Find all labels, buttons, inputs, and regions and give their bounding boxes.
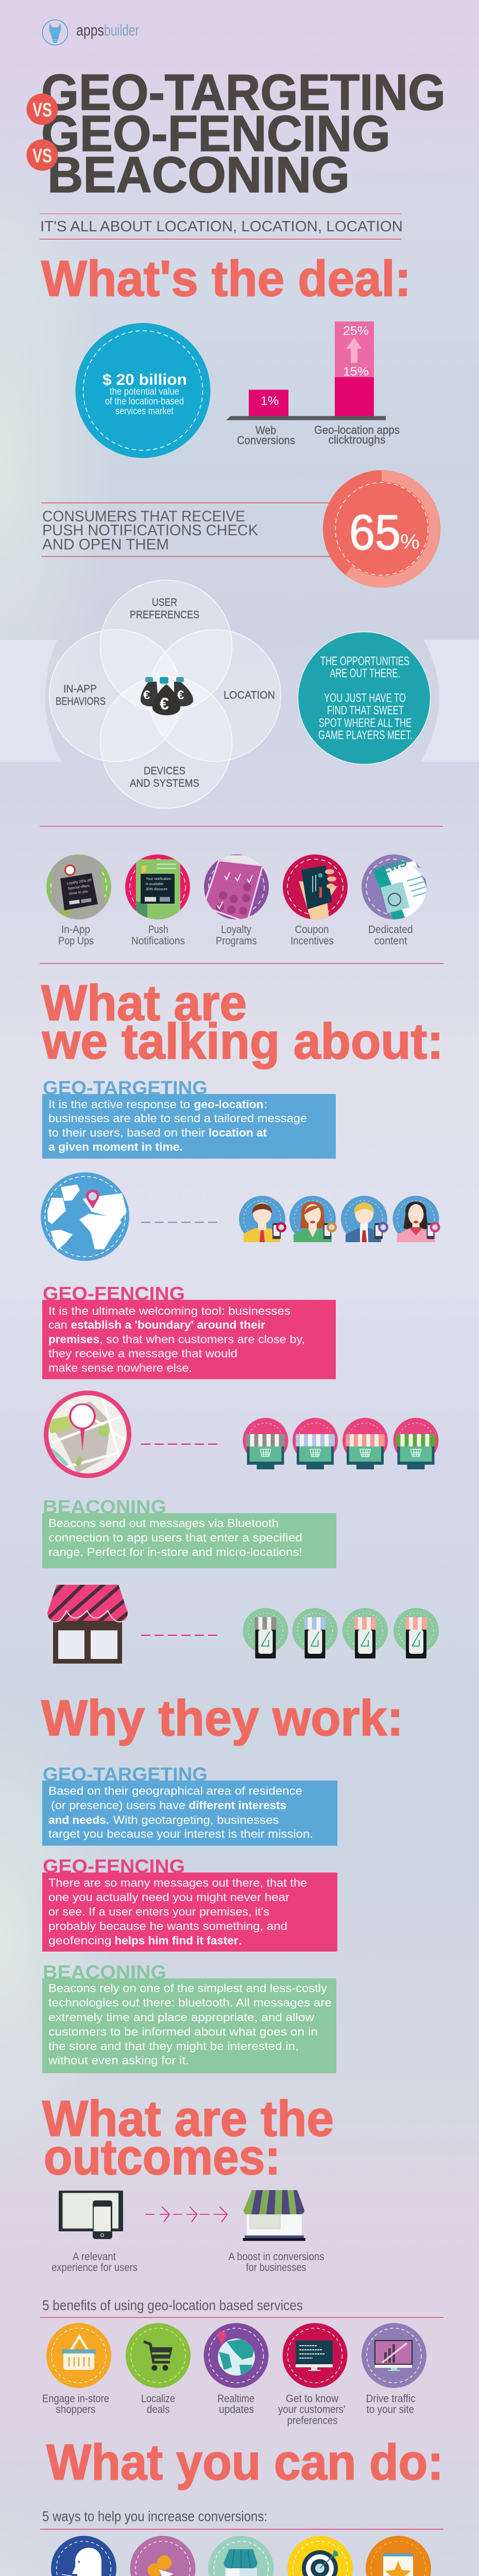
panel: why geo-fencing works: .. xyxy=(238,1934,242,1947)
stat circle: 20 billion: the potential value xyxy=(110,386,179,397)
dashed connector xyxy=(141,1635,219,1636)
donut: 65 percent xyxy=(323,470,440,587)
stat text: push notifications xyxy=(42,508,258,553)
stat circle: 20 billion: $ 20 billion xyxy=(102,370,187,388)
heading: what's the deal: What's the deal: xyxy=(41,250,411,307)
outcome labels: A boost in conversions xyxy=(229,2251,324,2263)
panel: why geo-fencing works: GEO-FENCING xyxy=(43,1856,185,1877)
icon: tablet and phone xyxy=(59,2191,123,2239)
venn diagram: DEVICES xyxy=(144,765,185,777)
logo: appsbuilder top: builder xyxy=(104,21,139,39)
icon: store green awning xyxy=(394,1418,439,1469)
icon: match currency xyxy=(130,2536,196,2576)
stat text: push notifications: PUSH NOTIFICATIONS CHECK xyxy=(42,522,258,539)
benefit labels: Engage in-store xyxy=(42,2393,109,2405)
icon: realtime updates globe xyxy=(204,2323,269,2388)
panel: geo-targeting definition: It is the active response to xyxy=(48,1098,190,1111)
panel: why beaconing works: technologies out there: bluetooth. All messages are xyxy=(48,1996,332,2009)
icon labels: five engagement types: Programs xyxy=(216,935,256,947)
icon: know customers monitor xyxy=(282,2323,347,2388)
panel: geo-fencing definition: they receive a message that would xyxy=(48,1347,237,1360)
icon labels: five engagement types: Pop Ups xyxy=(58,935,94,947)
vs badge 2 xyxy=(27,139,58,171)
icon labels: five engagement types: Incentives xyxy=(290,935,334,947)
icon: test visual elements star xyxy=(366,2536,431,2576)
icon: money bags xyxy=(141,677,193,715)
icon: beacon device salmon 2 xyxy=(394,1608,439,1658)
panel: geo-fencing definition: , so that when customers are close by, xyxy=(99,1333,305,1346)
panel: geo-fencing definition: establish a 'boundary' around their xyxy=(71,1318,265,1331)
donut: 65 percent: % xyxy=(400,531,420,553)
stat circle: 20 billion xyxy=(75,323,210,458)
panel: geo-targeting definition xyxy=(42,1077,336,1159)
icon: experiment with languages xyxy=(51,2536,116,2576)
icon: map with pin xyxy=(44,1391,134,1484)
dashed connector xyxy=(141,1444,219,1445)
icon: engage in-store basket xyxy=(46,2323,111,2388)
icon: globe with pin xyxy=(41,1173,129,1261)
subheading: 5 ways: 5 ways to help you increase conversions: xyxy=(42,2508,267,2524)
icon: in-app pop ups: Special offers xyxy=(67,884,90,891)
panel: beaconing definition xyxy=(42,1496,336,1568)
panel: why geo-targeting works: GEO-TARGETING xyxy=(43,1764,208,1785)
panel: geo-fencing definition: make sense nowhere else. xyxy=(48,1361,192,1375)
donut: 65 percent: 65 xyxy=(349,505,401,560)
stat circle: 20 billion: services market xyxy=(115,406,174,417)
dashed connector xyxy=(141,1222,220,1223)
outcome labels: experience for users xyxy=(52,2262,138,2274)
panel: geo-targeting definition: to their users, based on their xyxy=(48,1126,205,1139)
benefit labels: updates xyxy=(219,2404,254,2415)
panel: geo-targeting definition: a given moment in time. xyxy=(48,1141,183,1153)
panel: geo-targeting definition: geo-location xyxy=(194,1098,264,1111)
icon: push notifications: is available xyxy=(146,883,164,886)
callout: opportunities: ARE OUT THERE. xyxy=(330,667,400,680)
icon labels: five engagement types xyxy=(58,924,413,947)
panel: why geo-fencing works: probably because he wants something, and xyxy=(48,1920,287,1933)
bar chart: conversions: Conversions xyxy=(237,434,295,447)
heading: what are the outcomes: What are the xyxy=(42,2091,334,2146)
panel: why geo-targeting works: With geotargeting, businesses xyxy=(113,1814,279,1826)
icon labels: five engagement types: Dedicated xyxy=(368,924,413,936)
icon: money bags: € xyxy=(143,688,150,702)
callout: opportunities: SPOT WHERE ALL THE xyxy=(319,716,412,730)
benefit labels: Drive traffic xyxy=(366,2393,415,2405)
benefit labels: Localize xyxy=(141,2393,175,2405)
icon: beacon device blue xyxy=(293,1608,338,1658)
icon: woman green top with phone xyxy=(289,1196,337,1242)
venn diagram: LOCATION xyxy=(224,689,275,701)
icon: man yellow jacket with phone xyxy=(239,1196,286,1242)
subheading: 5 benefits: 5 benefits of using geo-location based services xyxy=(42,2297,303,2313)
title: GEO-TARGETING xyxy=(41,64,446,121)
panel: why geo-fencing works: one you actually need you might never hear xyxy=(48,1891,289,1904)
panel: geo-targeting definition: : xyxy=(264,1098,267,1111)
bar chart: conversions: 15% xyxy=(343,365,369,379)
icon labels: five engagement types: Coupon xyxy=(295,924,329,936)
callout: opportunities xyxy=(298,632,431,765)
venn diagram: PREFERENCES xyxy=(130,609,199,621)
vs badge 1 xyxy=(27,94,58,125)
icon labels: five engagement types: In-App xyxy=(61,924,90,936)
benefit labels: your customers' xyxy=(278,2404,345,2415)
panel: why beaconing works: extremely time and place appropriate, and allow xyxy=(48,2011,314,2024)
venn diagram: AND SYSTEMS xyxy=(130,777,199,789)
panel: why beaconing works: BEACONING xyxy=(43,1962,166,1982)
bar chart: conversions: clicktroughs xyxy=(329,433,385,446)
icon: match marketing target xyxy=(287,2536,353,2576)
vs badge 1: VS xyxy=(32,99,52,121)
heading: what are we talking about: we talking about: xyxy=(42,1013,443,1070)
icon labels: five engagement types: content xyxy=(374,935,407,947)
panel: beaconing definition: Beacons send out messages via Bluetooth xyxy=(48,1517,279,1530)
benefit labels: deals xyxy=(147,2404,170,2415)
benefit labels: Get to know xyxy=(286,2393,339,2405)
callout: opportunities: GAME PLAYERS MEET. xyxy=(318,728,413,742)
venn diagram: USER xyxy=(152,597,177,608)
heading: what are we talking about xyxy=(41,975,443,1070)
title: BEACONING xyxy=(47,146,350,203)
benefit labels xyxy=(42,2393,415,2427)
panel: why beaconing works: customers to be informed about what goes on in xyxy=(48,2025,318,2038)
panel: geo-targeting definition: businesses are able to send a tailored message xyxy=(48,1112,307,1125)
panel: why beaconing works xyxy=(42,1962,336,2073)
callout: opportunities: THE OPPORTUNITIES xyxy=(320,654,409,668)
icon: in-app pop ups xyxy=(46,854,111,920)
heading: what you can do: What you can do: xyxy=(46,2434,443,2490)
bar chart: conversions: 25% xyxy=(343,324,369,338)
panel: beaconing definition: BEACONING xyxy=(43,1496,166,1518)
benefit labels: to your site xyxy=(367,2404,414,2415)
panel: why beaconing works: Beacons rely on one of the simplest and less-costly xyxy=(48,1981,327,1995)
icon labels: five engagement types: Loyalty xyxy=(221,924,251,936)
panel: why geo-targeting works: and needs. xyxy=(48,1814,109,1826)
logo: appsbuilder top: apps xyxy=(76,21,104,39)
stat text: push notifications: AND OPEN THEM xyxy=(42,536,169,553)
title: GEO-FENCING xyxy=(41,105,390,162)
panel: beaconing definition: range. Perfect for in-store and micro-locations! xyxy=(48,1546,302,1558)
vs badge 2: VS xyxy=(32,145,52,167)
panel: geo-fencing definition: It is the ultimate welcoming tool: businesses xyxy=(48,1304,290,1317)
icon: loyalty programs xyxy=(203,854,269,922)
callout: opportunities: YOU JUST HAVE TO xyxy=(324,691,406,705)
stat text: push notifications: CONSUMERS THAT RECEIVE xyxy=(42,508,245,525)
heading: what are the outcomes xyxy=(42,2091,334,2185)
icon: money bags: € xyxy=(177,688,184,702)
outcome labels: for businesses xyxy=(246,2262,306,2274)
panel: geo-fencing definition: GEO-FENCING xyxy=(43,1283,185,1304)
panel: why geo-targeting works xyxy=(42,1764,337,1845)
icon: push notifications: 30% discount xyxy=(146,888,167,891)
panel: why geo-fencing works: helps him find it faster xyxy=(114,1934,238,1947)
icon: dedicated content xyxy=(362,854,426,919)
panel: geo-fencing definition xyxy=(42,1283,336,1379)
icon: money bags: € xyxy=(160,694,169,713)
title xyxy=(41,64,446,203)
icon: push notifications xyxy=(125,854,190,921)
icon: store grey awning xyxy=(243,1418,288,1469)
venn diagram xyxy=(49,580,281,808)
icon: localize deals cart xyxy=(126,2323,191,2388)
icon: store blue awning xyxy=(293,1418,338,1469)
panel: why geo-fencing works: There are so many messages out there, that the xyxy=(48,1876,307,1889)
icon: store salmon awning xyxy=(343,1418,388,1469)
panel: why beaconing works: the store and that they might be interested in, xyxy=(48,2040,299,2053)
icon: drive traffic monitor xyxy=(362,2323,426,2388)
icon: beacon device salmon xyxy=(343,1608,388,1658)
icon: storefront xyxy=(243,2190,305,2241)
bar chart: conversions: 1% xyxy=(261,394,279,408)
icon: in-app pop ups: close to you xyxy=(69,890,88,896)
outcome labels: A relevant xyxy=(73,2251,116,2263)
icon: beacon device grey xyxy=(243,1608,288,1658)
panel: why beaconing works: without even asking for it. xyxy=(48,2054,189,2067)
callout: opportunities: FIND THAT SWEET xyxy=(327,704,404,717)
panel: geo-fencing definition: premises xyxy=(48,1333,99,1346)
icon: man blue suit with phone xyxy=(341,1196,388,1242)
panel: geo-targeting definition: GEO-TARGETING xyxy=(43,1077,208,1098)
panel: why geo-targeting works: Based on their geographical area of residence xyxy=(48,1785,302,1797)
icon: dedicated content: NEWS xyxy=(372,856,408,879)
icon labels: five engagement types: Notifications xyxy=(131,935,185,947)
benefit labels: shoppers xyxy=(56,2404,96,2415)
panel: beaconing definition: connection to app users that enter a specified xyxy=(48,1531,302,1544)
panel: why geo-targeting works: different interests xyxy=(189,1799,286,1811)
icon: coupon incentives xyxy=(283,854,348,922)
icon: push notifications: Your notification xyxy=(146,877,172,881)
panel: why geo-fencing works: or see. If a user enters your premises, it's xyxy=(48,1905,269,1918)
panel: why geo-targeting works: target you because your interest is their mission. xyxy=(48,1827,313,1840)
arrow: users to businesses xyxy=(145,2207,227,2222)
icon: woman pink blouse with phone xyxy=(392,1196,440,1242)
benefit labels: Realtime xyxy=(217,2393,254,2405)
icon: serve local offers store xyxy=(208,2536,274,2576)
venn diagram: IN-APP xyxy=(63,683,97,695)
heading: why they work: Why they work: xyxy=(41,1690,403,1746)
venn diagram: BEHAVIORS xyxy=(56,696,106,707)
panel: why geo-fencing works: geofencing xyxy=(48,1934,111,1947)
bar chart: conversions xyxy=(226,321,400,447)
panel: why geo-fencing works xyxy=(42,1856,337,1952)
subtitle: IT'S ALL ABOUT LOCATION, LOCATION, LOCATION xyxy=(40,218,403,235)
icon labels: five engagement types: Push xyxy=(148,924,168,936)
panel: geo-targeting definition: location at xyxy=(209,1126,267,1139)
logo: appsbuilder top xyxy=(42,20,139,45)
panel: geo-fencing definition: can xyxy=(48,1318,67,1331)
icon: in-app pop ups: Loyalty 25% off xyxy=(66,878,92,886)
benefit labels: preferences xyxy=(287,2415,338,2427)
band behind venn xyxy=(0,640,479,762)
heading: what are the outcomes: outcomes: xyxy=(44,2129,280,2185)
panel: why geo-targeting works: (or presence) users have xyxy=(51,1799,185,1811)
bar chart: conversions: Geo-location apps xyxy=(314,423,400,436)
outcome labels xyxy=(52,2251,324,2274)
stat circle: 20 billion: of the location-based xyxy=(105,396,184,407)
heading: what are we talking about: What are xyxy=(41,975,247,1031)
bar chart: conversions: Web xyxy=(255,423,276,437)
icon: beacon-enabled store xyxy=(47,1585,128,1664)
